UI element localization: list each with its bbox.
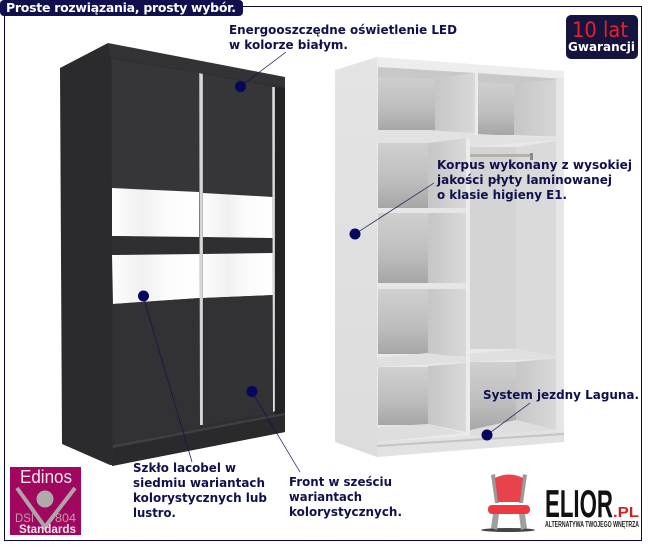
- callout: korpus: Korpus wykonany z wysokiej: [437, 158, 632, 172]
- callout: front: Front w sześciu: [289, 475, 392, 489]
- left side panel: [335, 57, 377, 457]
- left side panel: [60, 43, 113, 465]
- shelves: [377, 208, 466, 213]
- callout: front: [246, 386, 402, 519]
- callout: system jezdny: System jezdny Laguna.: [483, 388, 639, 402]
- divider: [466, 138, 470, 434]
- shelf under upper section: [377, 130, 556, 147]
- callout: LED: [229, 23, 457, 92]
- callout: LED: w kolorze białym.: [229, 38, 348, 52]
- callout: szkło: Szkło lacobel w: [133, 461, 236, 475]
- top panel: [377, 57, 564, 79]
- callout: front: wariantach: [289, 490, 362, 504]
- white wardrobe interior view: [335, 57, 564, 457]
- upper glass: [112, 188, 199, 237]
- logo: Elior.pl: .PL: [613, 504, 639, 521]
- body: [377, 57, 564, 457]
- logo: Edinos DSI 804 Standards: Standards: [19, 522, 76, 536]
- middle dark band: [112, 236, 199, 255]
- lower glass: [112, 254, 200, 304]
- callout: szkło: lustro.: [133, 506, 176, 520]
- callout: front: kolorystycznych.: [289, 505, 402, 519]
- callout: korpus: [350, 158, 632, 240]
- callout: korpus: jakości płyty laminowanej: [436, 173, 612, 187]
- upper left compartment: [378, 75, 435, 131]
- front background: [111, 57, 285, 466]
- floors: [377, 424, 463, 442]
- callout: korpus: o klasie higieny E1.: [437, 188, 567, 202]
- heading: Proste rozwiązania, prosty wybór.: [6, 0, 236, 15]
- hanging rail: [470, 154, 532, 157]
- right door upper: [203, 74, 273, 197]
- callout: szkło: siedmiu wariantach: [133, 476, 265, 490]
- callout: szkło: kolorystycznych lub: [133, 491, 267, 505]
- lower doors: [113, 298, 200, 444]
- logo: Edinos DSI 804 Standards: [10, 467, 81, 536]
- left door upper: [112, 59, 199, 192]
- callout: LED: Energooszczędne oświetlenie LED: [229, 23, 457, 37]
- logo: Edinos DSI 804 Standards: DSI: [15, 511, 34, 525]
- right edge: [556, 79, 564, 431]
- top band: [108, 43, 285, 88]
- badge: 10 lat gwarancji: [566, 15, 638, 59]
- logo: Edinos DSI 804 Standards: Edinos: [20, 467, 72, 487]
- plinth: [112, 414, 285, 466]
- upper right compartment: [478, 82, 514, 135]
- logo: red chair: [481, 474, 535, 532]
- callout: system jezdny: [482, 388, 639, 440]
- plinth: [377, 430, 564, 457]
- door rails: [199, 73, 203, 425]
- left column compartments: [378, 143, 428, 208]
- callout: szkło: [133, 290, 267, 520]
- badge: 10 lat gwarancji: 10 lat: [572, 18, 628, 42]
- logo: Edinos DSI 804 Standards: 804: [55, 511, 76, 525]
- dark wardrobe front view: [60, 43, 285, 466]
- right inner strip: [275, 87, 285, 417]
- badge: 10 lat gwarancji: Gwarancji: [568, 40, 635, 54]
- right column: [470, 147, 516, 349]
